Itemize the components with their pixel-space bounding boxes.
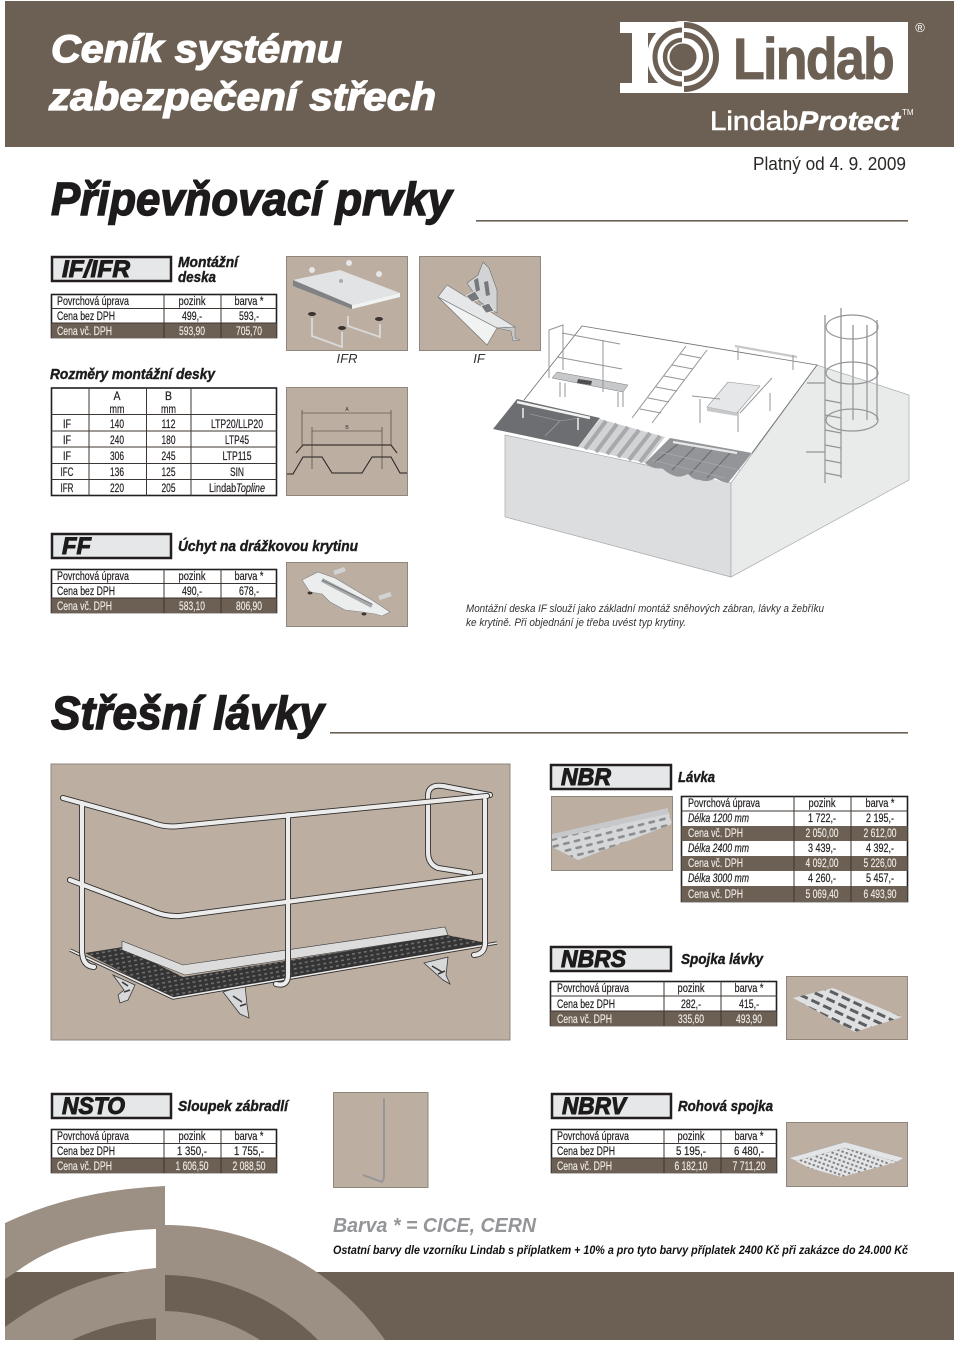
dimensions table: IFC [60,465,74,479]
title: Ceník systému [51,28,342,71]
code label: NBR [551,764,671,791]
back frame tube [428,786,490,873]
dimensions table: 112 [162,417,176,431]
price table: NBR: 5 457,- [866,871,894,885]
diagram panel: plate dimensions: B [345,425,349,431]
diagram panel: plate dimensions: A [345,407,349,413]
price table: NBRS: 282,- [681,997,701,1011]
price table: NBR: 6 493,90 [864,887,897,901]
dimensions table: A [114,389,121,403]
dimensions table: 306 [110,449,124,463]
price table: NBRV: barva * [734,1129,764,1143]
price table: NBR: 4 392,- [866,841,894,855]
dimensions table: IFR [60,481,74,495]
dimensions table: LTP45 [225,433,249,447]
dimensions table: IF [63,449,71,463]
dimensions table: SIN [230,465,244,479]
price table: IF/IFR [51,294,277,338]
price table: NBR: Cena vč. DPH [688,826,743,840]
price table: NBR: 3 439,- [808,841,836,855]
price table: NBRS: barva * [734,981,764,995]
price table: NBR: 4 092,00 [806,856,839,870]
Lindab logo: Lindab [733,27,894,92]
price table: IF/IFR: Cena vč. DPH [57,324,112,338]
price table: NBRV: 7 711,20 [732,1159,766,1173]
price table: FF: 583,10 [179,599,205,613]
code label: NBR: NBR [561,764,612,791]
price table: NBR: Délka 3000 mm [688,871,749,885]
price table: NBRV: 6 480,- [734,1144,764,1158]
dimensions table: IF [63,417,71,431]
price table: IF/IFR: pozink [178,294,206,308]
code label: FF: FF [62,533,92,560]
code label: IF/IFR: IF/IFR [62,256,131,283]
roof ladder [632,346,707,423]
price table: NBR: pozink [808,796,836,810]
dimensions table: 245 [162,449,176,463]
product name: Montážní deska: deska [178,270,216,286]
heading: Připevňovací prvky: Připevňovací prvky [51,173,454,225]
footer band with logo arcs [5,1186,954,1340]
header band [5,1,954,147]
price table: FF: Cena bez DPH [57,584,115,598]
large panel: roof walkway with railing [51,764,510,1040]
footer arcs [5,1186,385,1340]
price table: NBRV: 5 195,- [676,1144,706,1158]
rails and posts [63,796,487,985]
price table: FF: 806,90 [236,599,262,613]
price table: NBRS: Cena vč. DPH [557,1012,612,1026]
price table: NBR: 4 260,- [808,871,836,885]
price table: NBRS [550,981,777,1026]
photo panel: railing post [334,1092,428,1188]
price table: NBR: 2 612,00 [864,826,897,840]
price table: IF/IFR: Cena bez DPH [57,309,115,323]
roof walkway with railing [549,325,628,407]
dimensions table [51,388,277,496]
price table: NSTO: 1 606,50 [176,1159,209,1173]
dimensions table: LTP115 [222,449,252,463]
subheading: Rozměry montážní desky: Rozměry montážní desky [50,367,216,383]
house walls [505,365,909,577]
dimensions table: 240 [110,433,124,447]
price table: NBR: 2 195,- [866,811,894,825]
dimensions table: 220 [110,481,124,495]
roof covering: tiles [645,438,752,483]
dimensions table: 140 [110,417,124,431]
price table: FF [51,569,277,613]
code label: IF/IFR [52,256,171,283]
product name: Rohová spojka: Rohová spojka [678,1099,773,1115]
price table: NBRS: pozink [678,981,705,995]
price table: NSTO [51,1129,277,1173]
brackets [113,957,450,1018]
dimensions table: 180 [162,433,176,447]
price table: NBRV: Cena vč. DPH [557,1159,612,1173]
price table: NBR: Délka 2400 mm [688,841,749,855]
price table: IF/IFR: barva * [234,294,264,308]
price table: NBRV [551,1129,777,1173]
code label: FF [52,533,171,560]
code label: NBRS [551,946,671,973]
Lindab logo: ® [915,20,925,35]
price table: NBR: 1 722,- [808,811,836,825]
price table: NBR: Délka 1200 mm [688,811,749,825]
code label: NSTO [52,1093,171,1120]
dimensions table: 125 [162,465,176,479]
title: zabezpečení střech [48,76,436,119]
price table: FF: 490,- [182,584,202,598]
price table: NBR: barva * [866,796,895,810]
price table: FF: 678,- [239,584,259,598]
roof hatch walkway [692,378,772,432]
price table: NSTO: Cena vč. DPH [57,1159,112,1173]
price table: NBR: 5 069,40 [806,887,839,901]
heading: Střešní lávky: Střešní lávky [51,687,326,739]
caption: IFR: IFR [337,351,357,366]
validity date: Platný od 4. 9. 2009 [753,153,906,174]
price table: NBR: Cena vč. DPH [688,887,743,901]
LindabProtect product line: Lindab Protect [710,106,901,136]
product name: Sloupek zábradlí: Sloupek zábradlí [178,1099,290,1115]
colour note heading: Barva * = CICE, CERN [333,1215,537,1237]
photo panel: IFR mounting plate [286,256,408,350]
price table: IF/IFR: 593,- [239,309,259,323]
trademark mark: TM [902,108,914,117]
caption: IF: IF [473,351,486,366]
note text: Montážní deska IF slouží jako základní montáž sněhových zábran, lávky a žebříku [466,603,824,615]
dimensions table: LTP20/LLP20 [211,417,263,431]
product name: Lávka: Lávka [678,770,715,786]
code label: NBRV [552,1093,671,1120]
price table: NBRS: Cena bez DPH [557,997,615,1011]
price table: NBRV: pozink [678,1129,705,1143]
price table: FF: Povrchová úprava [57,569,129,583]
roof illustration [493,308,909,577]
price table: NBRS: 415,- [739,997,759,1011]
price table: NBRV: Cena bez DPH [557,1144,615,1158]
dimensions table: 136 [110,465,124,479]
dimensions table: LindabTopline [209,481,265,495]
price table: IF/IFR: 705,70 [236,324,262,338]
photo panel: walkway tread [552,796,672,870]
price table: NSTO: Povrchová úprava [57,1129,129,1143]
Lindab logo [620,20,925,93]
price table: NSTO: 2 088,50 [232,1159,266,1173]
dimensions table: mm [110,402,124,416]
photo panel: IF mounting bracket [420,256,540,350]
code label: NBRS: NBRS [561,946,626,973]
price table: IF/IFR: Povrchová úprava [57,294,129,308]
price table: NBRV: Povrchová úprava [557,1129,629,1143]
price table: NBRS: 335,60 [678,1012,704,1026]
product name: Spojka lávky: Spojka lávky [681,952,764,968]
dimensions table: B [165,389,172,403]
price table: NBR: Cena vč. DPH [688,856,743,870]
price table: NSTO: pozink [178,1129,206,1143]
price table: NBRS: 493,90 [736,1012,762,1026]
walkway edge [70,943,497,998]
price table: NBRS: Povrchová úprava [557,981,629,995]
dimensions table: 205 [162,481,176,495]
price table: NSTO: 1 755,- [234,1144,264,1158]
toe board [122,927,448,975]
price table: FF: Cena vč. DPH [57,599,112,613]
title [48,28,436,119]
note text: ke krytině. Při objednání je třeba uvést typ krytiny. [466,617,686,629]
price table: FF: barva * [234,569,264,583]
snow guard [735,346,797,370]
roof covering: corrugated sheet [578,419,665,463]
note text [466,603,824,629]
photo panel: walkway connector [786,976,908,1040]
dimensions table: IF [63,433,71,447]
code label: NSTO: NSTO [62,1093,125,1120]
price table: NBR: 5 226,00 [864,856,897,870]
product name: Montážní deska: Montážní [178,255,240,271]
price table: NBR: Povrchová úprava [688,796,760,810]
price table: NSTO: Cena bez DPH [57,1144,115,1158]
price table: NSTO: 1 350,- [177,1144,207,1158]
diagram panel: plate dimensions [286,388,408,496]
photo panel: corner connector [786,1122,908,1186]
price table: NBRV: 6 182,10 [674,1159,708,1173]
caged ladder [806,308,878,483]
price table: IF/IFR: 593,90 [179,324,205,338]
photo panel: FF clip [286,562,408,626]
dimensions table: mm [161,402,176,416]
code label: NBRV: NBRV [562,1093,628,1120]
roof covering: shingles [493,399,600,447]
walkway grating [85,935,487,998]
price table: IF/IFR: 499,- [182,309,202,323]
colour note text: Ostatní barvy dle vzorníku Lindab s příplatkem + 10% a pro tyto barvy příplatek 2400 Kč při zakázce do 24.000 Kč [333,1245,909,1257]
price table: NBR: 2 050,00 [806,826,839,840]
price table: NBR [681,796,908,902]
product name: Montážní deska [178,255,240,286]
product name: Úchyt na drážkovou krytinu: Úchyt na drážkovou krytinu [178,537,358,555]
price table: FF: pozink [178,569,206,583]
price table: NSTO: barva * [234,1129,264,1143]
